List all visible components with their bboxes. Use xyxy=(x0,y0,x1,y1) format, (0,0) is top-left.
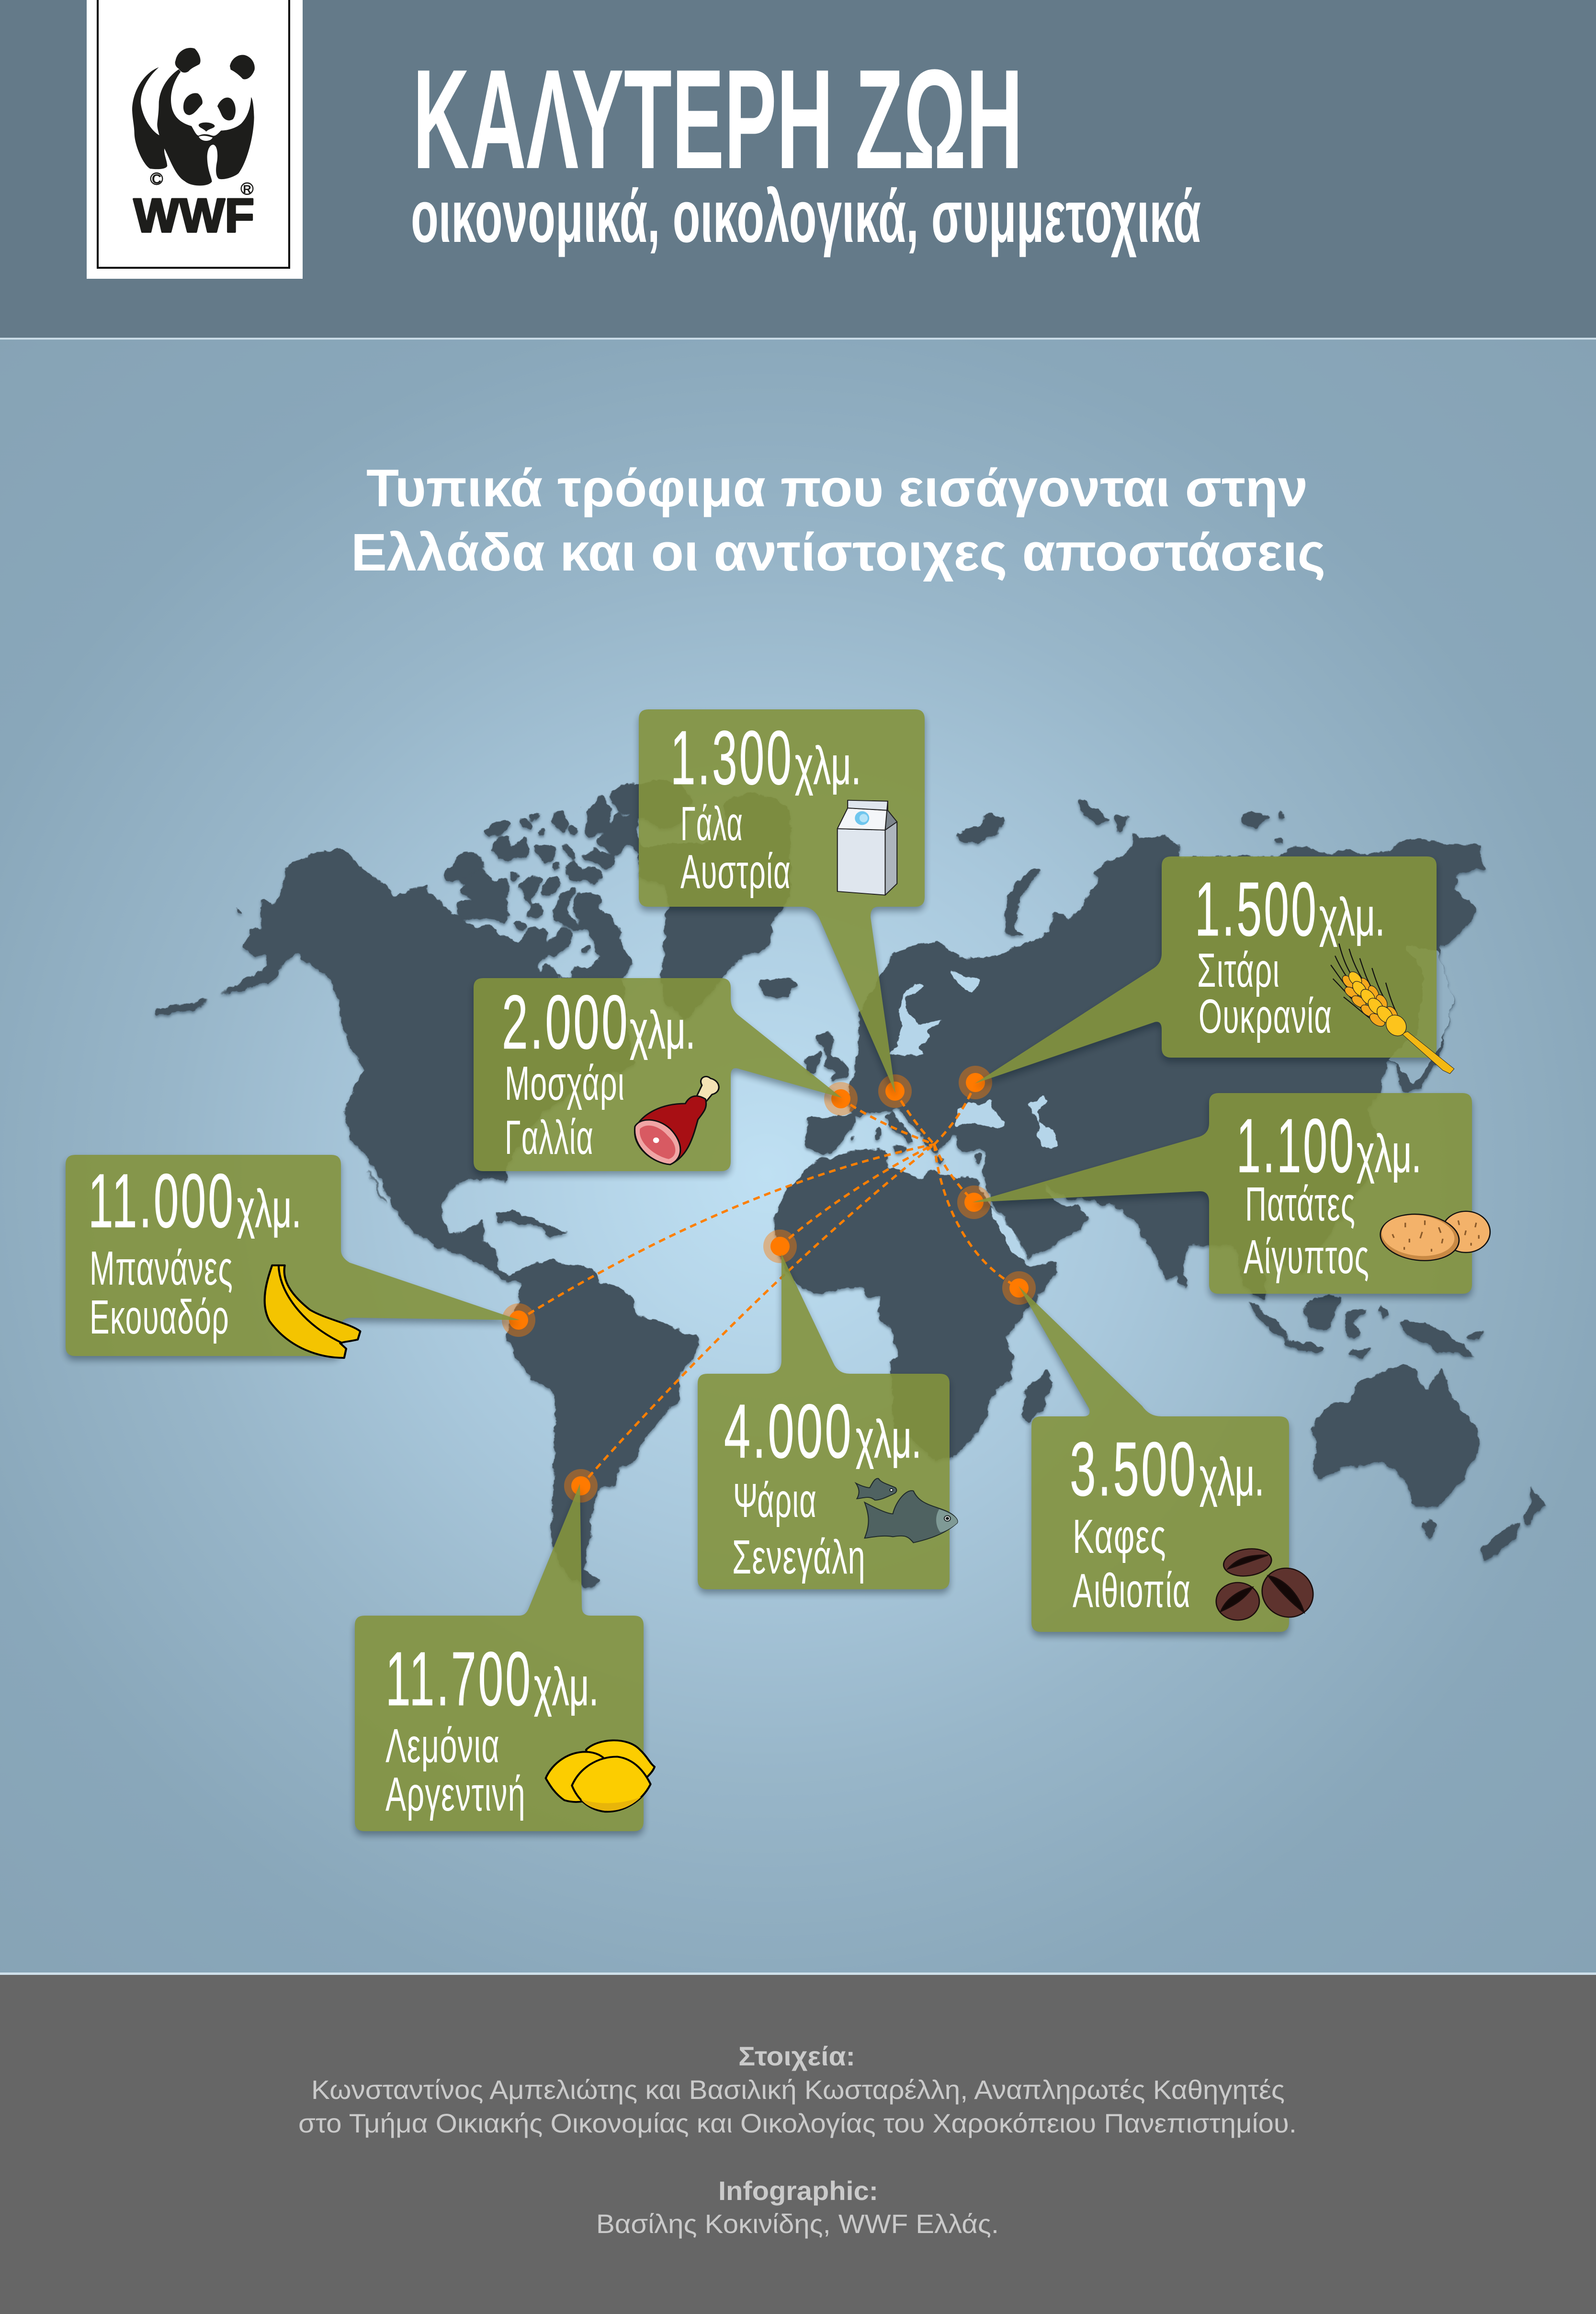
header band xyxy=(0,0,1596,340)
callout: lemons Argentina: 11.700 xyxy=(385,1636,532,1721)
callout: beef France: Μοσχάρι xyxy=(505,1057,625,1110)
europe and near east xyxy=(758,958,1173,1437)
inland seas xyxy=(890,944,1454,1260)
WWF logo: WWF xyxy=(134,189,254,242)
icon: wheat xyxy=(1331,944,1454,1074)
callout: potatoes Egypt: 1.100 xyxy=(1236,1103,1356,1188)
callout: beef France xyxy=(474,978,842,1171)
callout: coffee Ethiopia: Καφες xyxy=(1073,1510,1166,1563)
footer credits: Κωνσταντίνος Αμπελιώτης και Βασιλική Κωσταρέλλη, Αναπληρωτές Καθηγητές xyxy=(311,2075,1285,2105)
callout: potatoes Egypt: Πατάτες xyxy=(1245,1177,1356,1231)
callout: wheat Ukraine: Σιτάρι xyxy=(1197,944,1280,997)
flight routes xyxy=(519,1083,1019,1486)
icon: lemons xyxy=(546,1740,655,1812)
callout: bananas Ecuador: Εκουαδόρ xyxy=(90,1290,229,1344)
callout: beef France: 2.000 xyxy=(502,979,630,1065)
panda xyxy=(132,48,255,194)
footer credits xyxy=(298,2041,1297,2239)
section heading: Ελλάδα και οι αντίστοιχες αποστάσεις xyxy=(351,523,1325,582)
icon: fish xyxy=(856,1479,957,1543)
callout: lemons Argentina: Αργεντινή xyxy=(385,1767,526,1821)
callout: lemons Argentina xyxy=(355,1484,655,1831)
callout: coffee Ethiopia xyxy=(1019,1286,1321,1632)
callout: potatoes Egypt: Αίγυπτος xyxy=(1244,1230,1370,1284)
callout: milk Austria xyxy=(639,709,925,1093)
africa north xyxy=(773,1149,1058,1437)
icon: coffee beans xyxy=(1216,1546,1321,1624)
callout: wheat Ukraine: 1.500 xyxy=(1195,866,1318,952)
callout: potatoes Egypt: χλμ. xyxy=(1357,1124,1421,1184)
callout: coffee Ethiopia: χλμ. xyxy=(1200,1447,1264,1507)
WWF logo: R xyxy=(243,183,251,196)
callout: fish Senegal: Σενεγάλη xyxy=(732,1530,866,1584)
footer credits: Στοιχεία: xyxy=(738,2041,855,2071)
far east russia xyxy=(1053,797,1487,1245)
northern russia xyxy=(857,813,1304,1083)
callout: wheat Ukraine: Ουκρανία xyxy=(1199,990,1332,1043)
north america west and south xyxy=(153,847,635,1280)
section heading: Τυπικά τρόφιμα που εισάγονται στην xyxy=(366,459,1308,518)
section heading xyxy=(351,459,1325,582)
world map xyxy=(153,779,1548,1587)
callout: wheat Ukraine: χλμ. xyxy=(1319,887,1385,947)
callout: coffee Ethiopia: Αιθιοπία xyxy=(1073,1564,1191,1618)
callout: beef France: χλμ. xyxy=(630,1000,695,1060)
origin markers xyxy=(502,1066,1036,1503)
callout: bananas Ecuador xyxy=(66,1155,520,1358)
callout: milk Austria: χλμ. xyxy=(795,736,861,796)
canada arctic and greenland xyxy=(407,779,790,1019)
main background panel xyxy=(0,338,1596,1975)
callout: milk Austria: Γάλα xyxy=(680,797,743,851)
callout: fish Senegal xyxy=(698,1254,957,1589)
callout: fish Senegal: 4.000 xyxy=(724,1388,853,1474)
icon: bananas xyxy=(265,1265,360,1358)
footer credits: Βασίλης Κοκινίδης, WWF Ελλάς. xyxy=(596,2209,999,2239)
callout: bananas Ecuador: Μπανάνες xyxy=(90,1242,233,1295)
icon: potatoes xyxy=(1377,1210,1490,1265)
callout: wheat Ukraine xyxy=(975,856,1454,1083)
callout: potatoes Egypt xyxy=(973,1093,1490,1294)
africa south and south east asia and australia xyxy=(890,1173,1548,1564)
callout: lemons Argentina: Λεμόνια xyxy=(385,1719,500,1773)
footer panel xyxy=(0,1972,1596,2314)
title: ΚΑΛΥΤΕΡΗ ΖΩΗ xyxy=(413,40,1023,198)
callout: bananas Ecuador: 11.000 xyxy=(88,1158,235,1243)
icon: ham xyxy=(634,1077,719,1164)
WWF logo xyxy=(87,0,303,279)
WWF logo: C xyxy=(152,171,161,186)
callout: milk Austria: 1.300 xyxy=(670,715,793,800)
footer credits: Infographic: xyxy=(718,2176,878,2206)
callout: fish Senegal: χλμ. xyxy=(856,1409,921,1469)
icon: milk carton xyxy=(838,800,897,895)
callout: bananas Ecuador: χλμ. xyxy=(237,1179,301,1239)
callout: fish Senegal: Ψάρια xyxy=(733,1474,817,1527)
callout: coffee Ethiopia: 3.500 xyxy=(1070,1426,1198,1512)
footer credits: στο Τμήμα Οικιακής Οικονομίας και Οικολογίας του Χαροκόπειου Πανεπιστημίου. xyxy=(298,2108,1297,2138)
south america xyxy=(504,1260,701,1587)
callout: beef France: Γαλλία xyxy=(505,1111,594,1164)
callout: milk Austria: Αυστρία xyxy=(680,845,791,899)
callout: lemons Argentina: χλμ. xyxy=(534,1657,599,1717)
